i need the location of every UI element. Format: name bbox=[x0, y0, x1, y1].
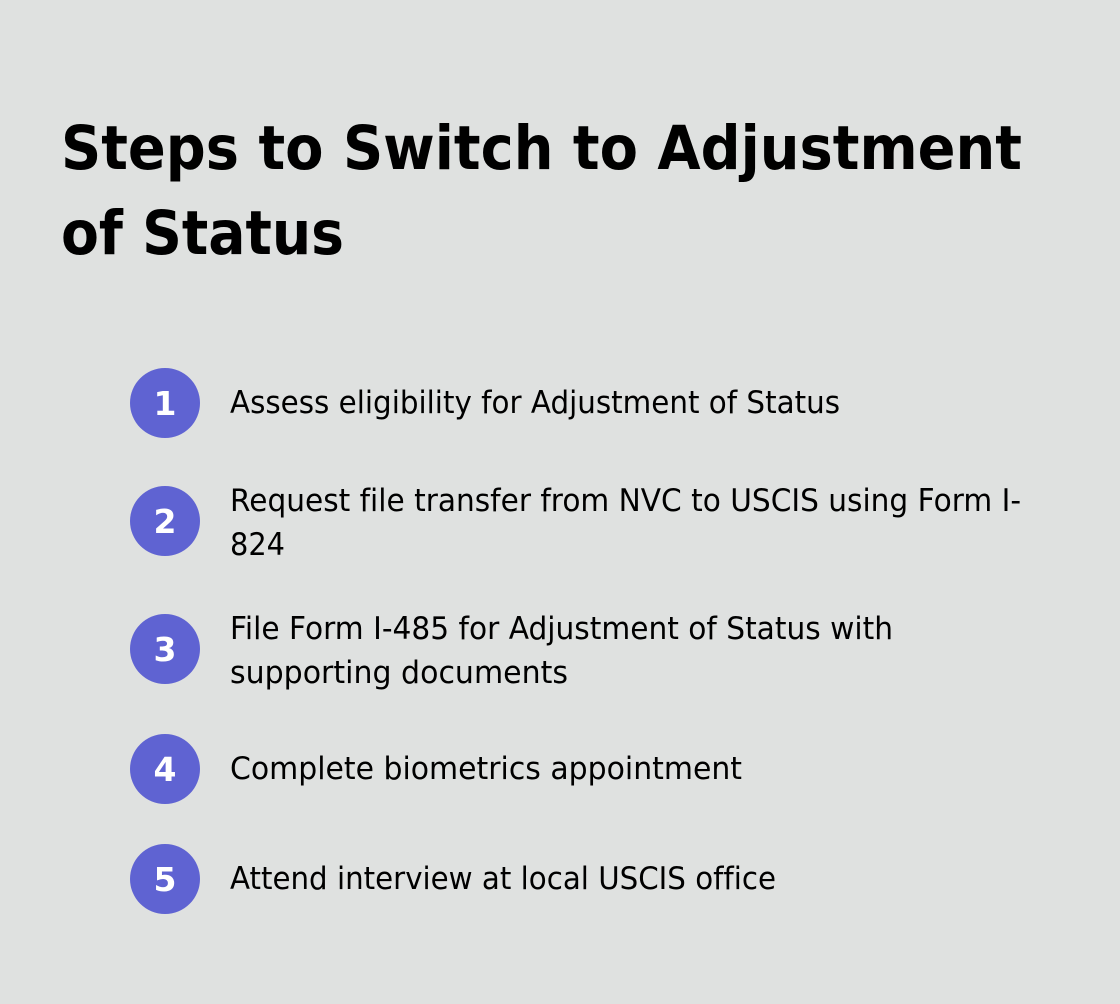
badge: number 4 bbox=[130, 734, 200, 804]
badge: number 3 bbox=[130, 614, 200, 684]
step 1 text: Assess eligibility for Adjustment of Status bbox=[230, 385, 840, 421]
title bbox=[61, 113, 1022, 269]
step 2 text: Request file transfer from NVC to USCIS using Form I- bbox=[230, 483, 1021, 519]
badge: number 3: 3 bbox=[154, 630, 176, 669]
step 5 text: Attend interview at local USCIS office bbox=[230, 861, 776, 897]
step 4 text: Complete biometrics appointment bbox=[230, 751, 742, 787]
title: of Status bbox=[61, 198, 344, 269]
step 1 bbox=[130, 368, 840, 438]
step 3 text: supporting documents bbox=[230, 655, 568, 691]
step 2 text: 824 bbox=[230, 527, 285, 563]
step 2 bbox=[130, 483, 1021, 563]
step 3 text bbox=[230, 611, 893, 691]
step 4 bbox=[130, 734, 742, 804]
badge: number 4: 4 bbox=[154, 750, 176, 789]
title: Steps to Switch to Adjustment bbox=[61, 113, 1022, 184]
step 3 bbox=[130, 611, 893, 691]
badge: number 1 bbox=[130, 368, 200, 438]
badge: number 2 bbox=[130, 486, 200, 556]
badge: number 5 bbox=[130, 844, 200, 914]
step 5 bbox=[130, 844, 776, 914]
step 3 text: File Form I-485 for Adjustment of Status with bbox=[230, 611, 893, 647]
badge: number 5: 5 bbox=[154, 860, 176, 899]
badge: number 1: 1 bbox=[154, 384, 176, 423]
step 2 text bbox=[230, 483, 1021, 563]
badge: number 2: 2 bbox=[154, 502, 176, 541]
